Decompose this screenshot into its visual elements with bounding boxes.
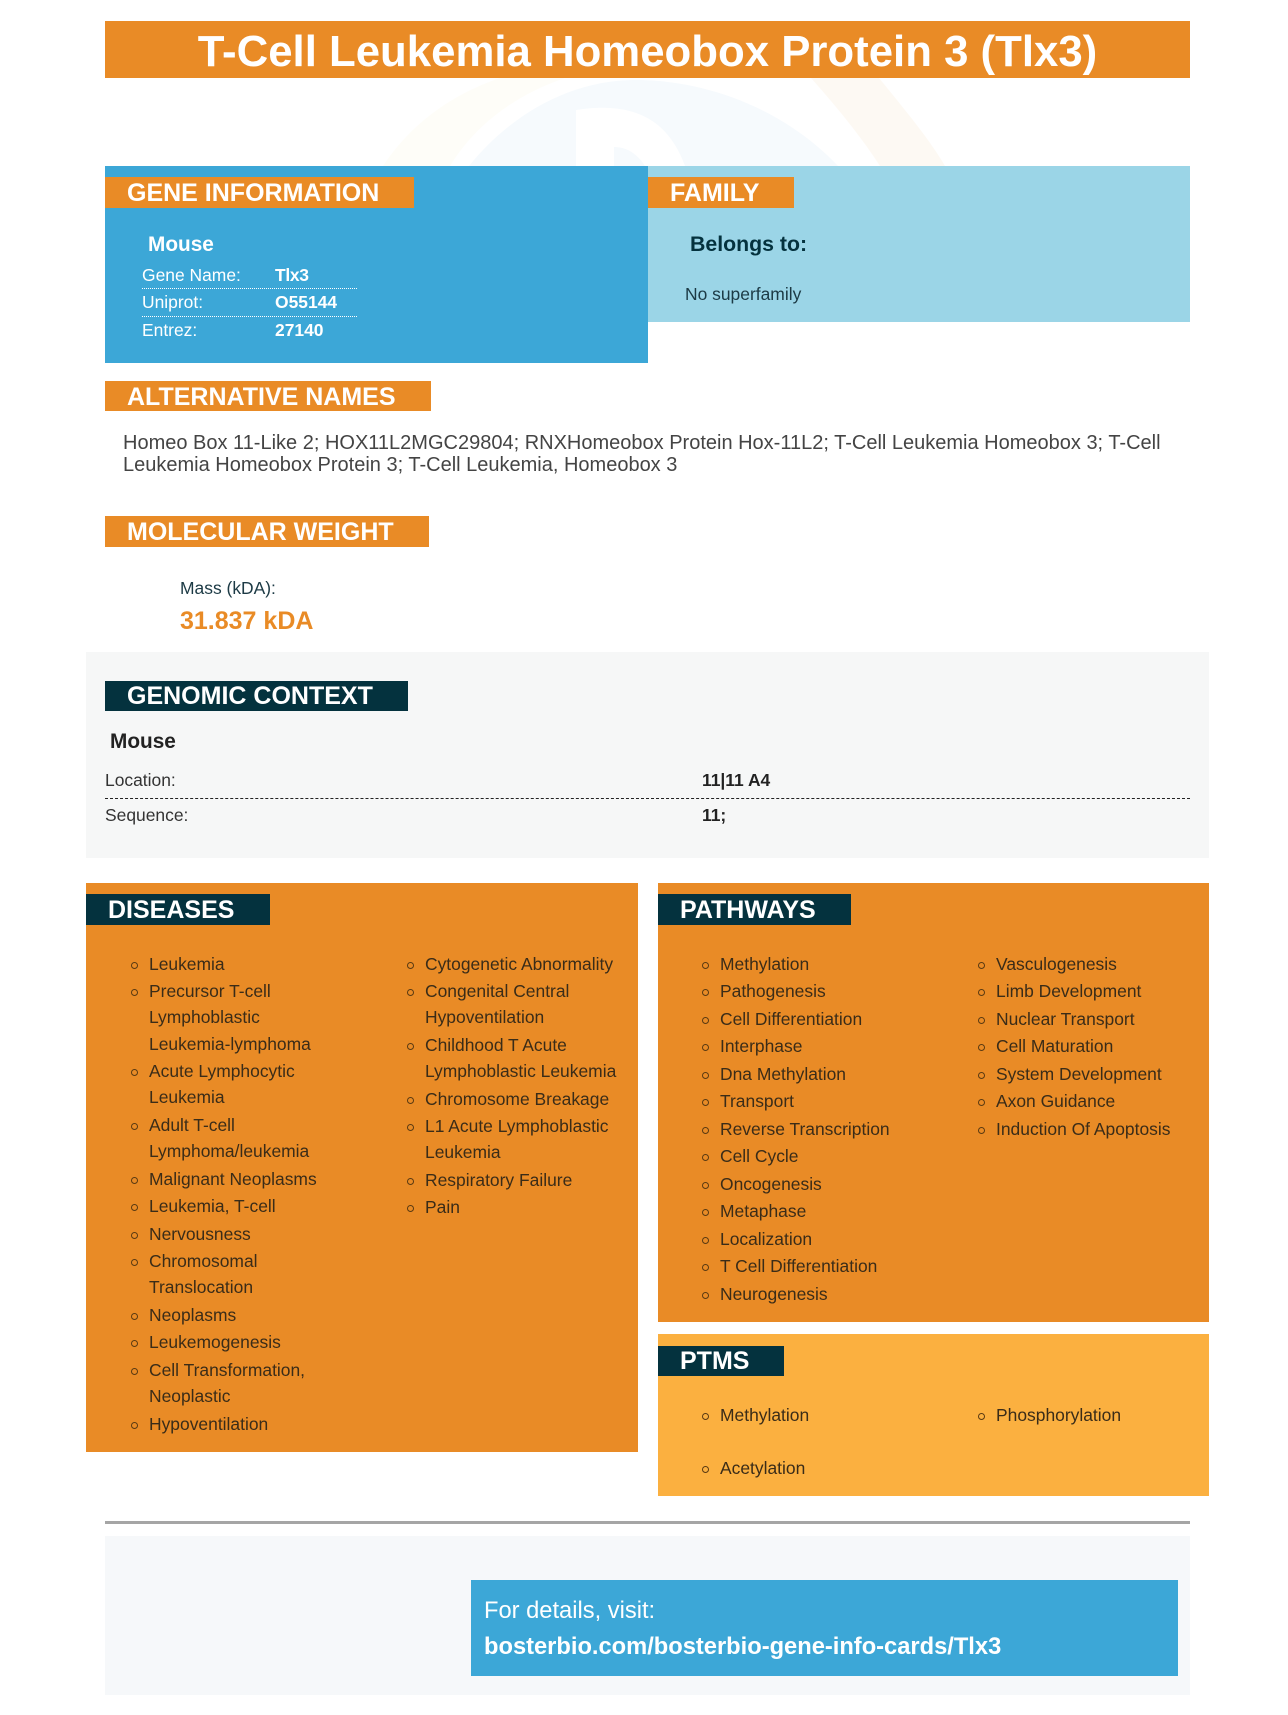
pathways list column 1 [702,954,890,1304]
pathways list column 2: Limb Development [996,981,1141,1001]
pathways list column 2: System Development [996,1064,1162,1084]
pathways list column 1: Metaphase [720,1201,806,1221]
heading: family: FAMILY [670,179,759,207]
location row: 11|11 A4 [702,770,770,790]
ptms list column 1 [702,1405,809,1478]
diseases list column 2: Childhood T Acute [425,1035,567,1055]
callout label: For details, visit: [484,1598,655,1624]
uniprot row: Uniprot: [142,292,203,312]
diseases list column 1: Cell Transformation, [149,1360,305,1380]
diseases list column 2: Cytogenetic Abnormality [425,954,613,974]
diseases list column 2: Lymphoblastic Leukemia [425,1061,616,1081]
heading: ptms: PTMS [680,1347,749,1375]
diseases list column 2: Pain [425,1197,460,1217]
uniprot row [142,292,337,312]
watermark logo [470,78,945,166]
pathways list column 1: Cell Differentiation [720,1009,862,1029]
diseases list column 1: Precursor T-cell [149,981,271,1001]
heading: ptms [658,1346,784,1376]
belongs to label: Belongs to: [690,232,807,256]
ptms list column 2: Phosphorylation [996,1405,1121,1425]
heading: molecular weight: MOLECULAR WEIGHT [127,518,394,546]
uniprot row: O55144 [275,292,337,312]
diseases list column 1: Lymphoblastic [149,1007,260,1027]
pathways list column 2: Axon Guidance [996,1091,1115,1111]
diseases list column 1: Malignant Neoplasms [149,1169,317,1189]
diseases list column 2 [407,954,616,1217]
heading: family [648,177,794,208]
heading: pathways [658,894,851,925]
panel: pathways [658,883,1209,1322]
panel: footer [105,1536,1190,1695]
diseases list column 2: Respiratory Failure [425,1170,572,1190]
diseases list column 1: Chromosomal [149,1251,258,1271]
diseases list column 1: Neoplasms [149,1305,236,1325]
diseases list column 2: Congenital Central [425,981,569,1001]
pathways list column 1: Cell Cycle [720,1146,798,1166]
entrez row: Entrez: [142,320,197,340]
pathways list column 1: Dna Methylation [720,1064,846,1084]
alternative names text: Leukemia Homeobox Protein 3; T-Cell Leukemia, Homeobox 3 [123,454,677,476]
pathways list column 1: Neurogenesis [720,1284,828,1304]
pathways list column 1: Methylation [720,954,809,974]
panel: diseases [86,883,638,1452]
diseases list column 1: Hypoventilation [149,1414,268,1434]
heading: genomic context: GENOMIC CONTEXT [127,682,373,710]
diseases list column 1: Neoplastic [149,1386,230,1406]
diseases list column 1: Leukemia, T-cell [149,1196,276,1216]
panel: gene information [105,166,648,363]
diseases list column 2: Leukemia [425,1142,501,1162]
diseases list column 1: Acute Lymphocytic [149,1061,295,1081]
location row [105,766,1190,799]
pathways list column 1: Localization [720,1229,812,1249]
pathways list column 1: Reverse Transcription [720,1119,890,1139]
diseases list column 2: Hypoventilation [425,1007,544,1027]
diseases list column 1: Lymphoma/leukemia [149,1141,309,1161]
panel: family [648,166,1190,322]
heading: diseases [86,894,270,925]
mass value: 31.837 kDA [180,607,313,635]
diseases list column 2: Chromosome Breakage [425,1089,609,1109]
alternative names text [123,432,1161,476]
diseases list column 1: Nervousness [149,1224,251,1244]
pathways list column 2: Cell Maturation [996,1036,1113,1056]
pathways list column 2: Induction Of Apoptosis [996,1119,1170,1139]
entrez row: 27140 [275,320,324,340]
pathways list column 2 [978,954,1170,1139]
diseases list column 1: Leukemia [149,1087,225,1107]
diseases list column 1: Translocation [149,1277,253,1297]
callout: details link [471,1580,1178,1676]
species label: Mouse [148,233,214,256]
location row: Location: [105,770,176,790]
diseases list column 1: Leukemia-lymphoma [149,1034,311,1054]
entrez row [142,320,324,340]
heading: gene information: GENE INFORMATION [127,179,379,207]
sequence row [105,805,726,825]
callout url: bosterbio.com/bosterbio-gene-info-cards/Tlx3 [484,1634,1001,1660]
sequence row: Sequence: [105,805,188,825]
pathways list column 1: Pathogenesis [720,981,826,1001]
diseases list column 1: Leukemia [149,954,225,974]
pathways list column 2: Vasculogenesis [996,954,1117,974]
diseases list column 1: Adult T-cell [149,1115,235,1135]
gene name row: Tlx3 [275,265,309,285]
family value: No superfamily [685,284,801,304]
gene name row: Gene Name: [142,265,241,285]
heading: alternative names: ALTERNATIVE NAMES [127,383,396,411]
heading: diseases: DISEASES [108,896,234,924]
title banner: T-Cell Leukemia Homeobox Protein 3 (Tlx3) [198,27,1097,76]
panel: genomic context [86,652,1209,858]
pathways list column 1: T Cell Differentiation [720,1256,877,1276]
pathways list column 1: Oncogenesis [720,1174,822,1194]
heading: pathways: PATHWAYS [680,896,816,924]
species label: Mouse [110,730,176,753]
pathways list column 1: Transport [720,1091,794,1111]
panel: ptms [658,1334,1209,1496]
gene name row [142,265,309,285]
ptms list column 1: Methylation [720,1405,809,1425]
alternative names text: Homeo Box 11-Like 2; HOX11L2MGC29804; RNXHomeobox Protein Hox-11L2; T-Cell Leukemia Homeobox 3; T-Cell [123,432,1161,454]
ptms list column 1: Acetylation [720,1458,805,1478]
pathways list column 1: Interphase [720,1036,802,1056]
pathways list column 2: Nuclear Transport [996,1009,1135,1029]
diseases list column 1 [131,954,317,1434]
diseases list column 2: L1 Acute Lymphoblastic [425,1116,609,1136]
diseases list column 1: Leukemogenesis [149,1332,281,1352]
mass label: Mass (kDA): [180,578,276,598]
sequence row: 11; [702,805,726,825]
